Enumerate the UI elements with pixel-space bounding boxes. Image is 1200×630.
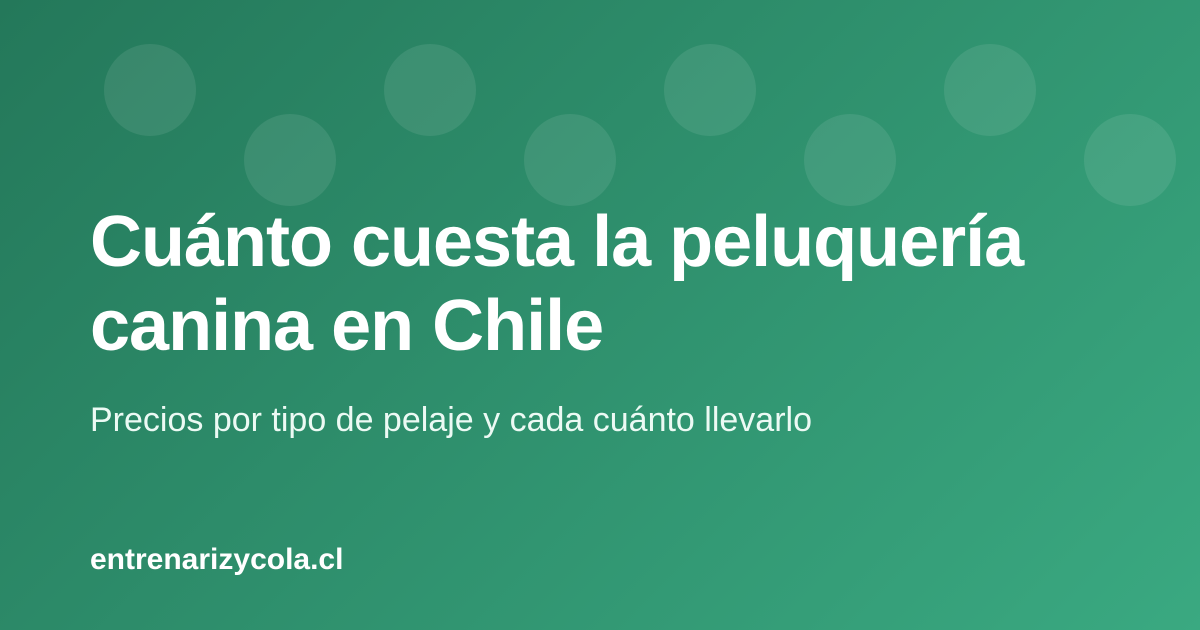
title [90, 202, 1025, 366]
decorative circles pattern [104, 44, 1176, 206]
title: Cuánto cuesta la peluquería [90, 202, 1023, 282]
site domain: entrenarizycola.cl [90, 543, 343, 576]
subtitle: Precios por tipo de pelaje y cada cuánto llevarlo [90, 401, 812, 439]
title: canina en Chile [90, 286, 603, 366]
